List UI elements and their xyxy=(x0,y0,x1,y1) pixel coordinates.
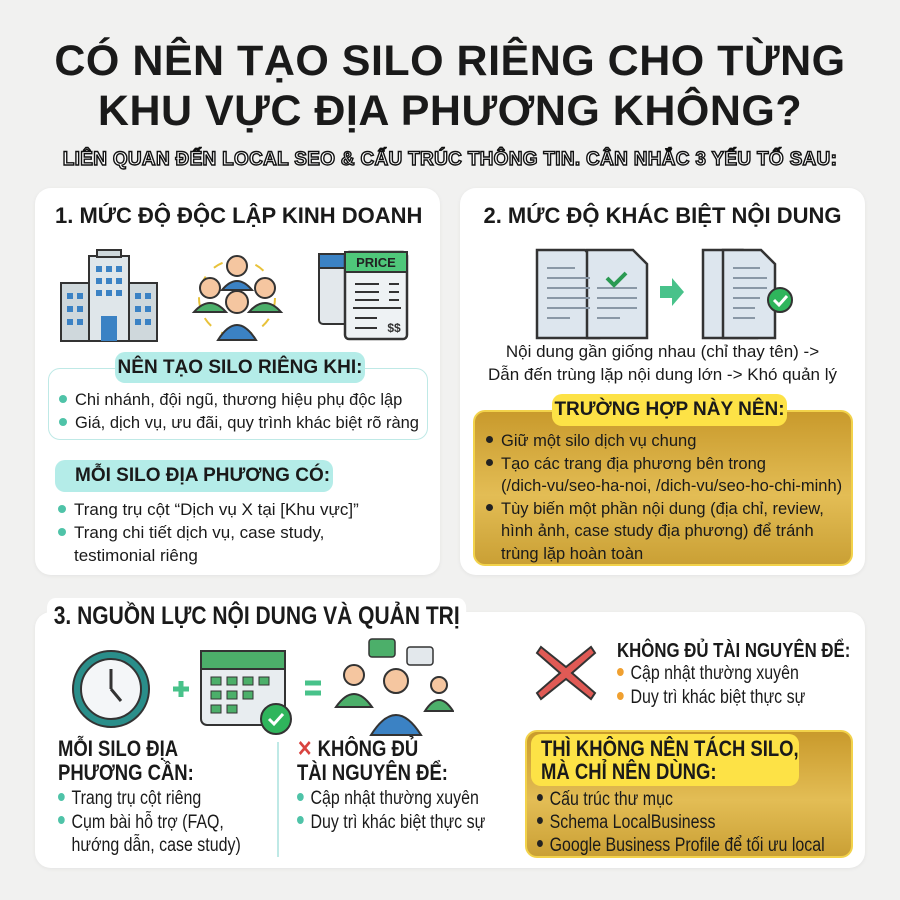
pill text xyxy=(541,736,799,784)
pill: moi silo dia phuong co: MỖI SILO ĐỊA PHƯƠNG CÓ: xyxy=(75,465,330,486)
heading 3: 3. NGUỒN LỰC NỘI DUNG VÀ QUẢN TRỊ xyxy=(54,602,460,630)
bullet list: Tùy biến một phần nội dung (địa chỉ, review, xyxy=(501,500,824,518)
subtitle: LIÊN QUAN ĐẾN LOCAL SEO & CẤU TRÚC THÔNG TIN. CÂN NHẮC 3 YẾU TỐ SAU: xyxy=(63,149,837,170)
pill: moi silo dia phuong co xyxy=(55,460,333,492)
text block: not enough resources xyxy=(297,736,485,832)
title: KHU VỰC ĐỊA PHƯƠNG KHÔNG? xyxy=(98,87,802,135)
bullet list: Cấu trúc thư mục xyxy=(550,789,673,810)
bullet list 1: Chi nhánh, đội ngũ, thương hiệu phụ độc lập xyxy=(75,391,402,409)
text block: right resources xyxy=(617,638,850,708)
bullet list 1: Giá, dịch vụ, ưu đãi, quy trình khác biệt rõ ràng xyxy=(75,414,419,432)
pill: do not split xyxy=(531,734,799,786)
text block: not enough resources: TÀI NGUYÊN ĐỂ: xyxy=(297,760,448,785)
pill: nen tao silo rieng khi xyxy=(115,352,365,383)
bullet list 2: Trang trụ cột “Dịch vụ X tại [Khu vực]” xyxy=(74,500,359,519)
callout box: when to create xyxy=(48,368,428,440)
text block: each silo needs: Trang trụ cột riêng xyxy=(71,788,201,809)
bullet list 1 xyxy=(59,391,419,432)
bullet list: (/dich-vu/seo-ha-noi, /dich-vu/seo-ho-chi-minh) xyxy=(501,477,842,495)
panel: 1 business independence xyxy=(35,188,440,575)
title xyxy=(54,36,846,135)
text block: not enough resources: ✕ KHÔNG ĐỦ xyxy=(297,736,418,761)
panel: 3 content resources xyxy=(35,612,865,868)
bullet list: Schema LocalBusiness xyxy=(550,812,716,833)
heading 1: 1. MỨC ĐỘ ĐỘC LẬP KINH DOANH xyxy=(55,203,422,228)
bullet list: Google Business Profile để tối ưu local xyxy=(550,835,825,856)
bullet list: hình ảnh, case study địa phương) để tránh xyxy=(501,522,814,540)
bullet list 2: Trang chi tiết dịch vụ, case study, xyxy=(74,523,324,542)
text block: not enough resources: Duy trì khác biệt thực sự xyxy=(310,812,485,832)
bullet list xyxy=(537,789,825,856)
bullet list 2 xyxy=(58,500,359,565)
icon: team xyxy=(192,255,284,341)
text block: each silo needs: Cụm bài hỗ trợ (FAQ, xyxy=(71,812,224,832)
text block: not enough resources: Cập nhật thường xuyên xyxy=(310,788,479,809)
icon: red X xyxy=(536,646,596,700)
text block: each silo needs: PHƯƠNG CẦN: xyxy=(58,760,194,785)
text block: each silo needs xyxy=(58,736,241,856)
text block: each silo needs: MỖI SILO ĐỊA xyxy=(58,736,178,761)
icon: price lists: PRICE xyxy=(356,255,396,270)
title: CÓ NÊN TẠO SILO RIÊNG CHO TỪNG xyxy=(54,37,846,85)
bullet list: Tạo các trang địa phương bên trong xyxy=(501,454,766,472)
icon equation: clock + calendar = team xyxy=(72,638,454,736)
gold box: recommendation xyxy=(473,410,853,566)
icon: building xyxy=(60,249,158,342)
text block: right resources: Duy trì khác biệt thực sự xyxy=(630,687,805,708)
pill text: THÌ KHÔNG NÊN TÁCH SILO, xyxy=(541,736,799,761)
pill: nen tao silo rieng khi: NÊN TẠO SILO RIÊNG KHI: xyxy=(118,357,362,378)
bullet list 2: testimonial riêng xyxy=(74,546,198,565)
text block: each silo needs: hướng dẫn, case study) xyxy=(71,835,241,856)
icon: price lists xyxy=(318,250,408,340)
text block: right resources: KHÔNG ĐỦ TÀI NGUYÊN ĐỂ: xyxy=(617,640,850,662)
pill text: MÀ CHỈ NÊN DÙNG: xyxy=(541,759,717,784)
panel: 2 content difference xyxy=(460,188,865,575)
pill: truong hop nay nen: TRƯỜNG HỢP NÀY NÊN: xyxy=(554,399,785,420)
text: duplicate warning: Nội dung gần giống nhau (chỉ thay tên) -> xyxy=(506,342,819,361)
heading 2: 2. MỨC ĐỘ KHÁC BIỆT NỘI DUNG xyxy=(483,203,842,228)
text: duplicate warning xyxy=(488,342,837,384)
icon: price lists: $$ xyxy=(387,321,401,335)
text: duplicate warning: Dẫn đến trùng lặp nội dung lớn -> Khó quản lý xyxy=(488,365,837,384)
icon: duplicate docs to unique doc xyxy=(536,248,793,340)
bullet list: trùng lặp hoàn toàn xyxy=(501,544,643,562)
gold box: instead use xyxy=(525,730,853,858)
text block: right resources: Cập nhật thường xuyên xyxy=(630,663,799,684)
bullet list xyxy=(486,432,842,562)
pill: truong hop nay nen xyxy=(552,394,787,426)
bullet list: Giữ một silo dịch vụ chung xyxy=(501,432,696,450)
